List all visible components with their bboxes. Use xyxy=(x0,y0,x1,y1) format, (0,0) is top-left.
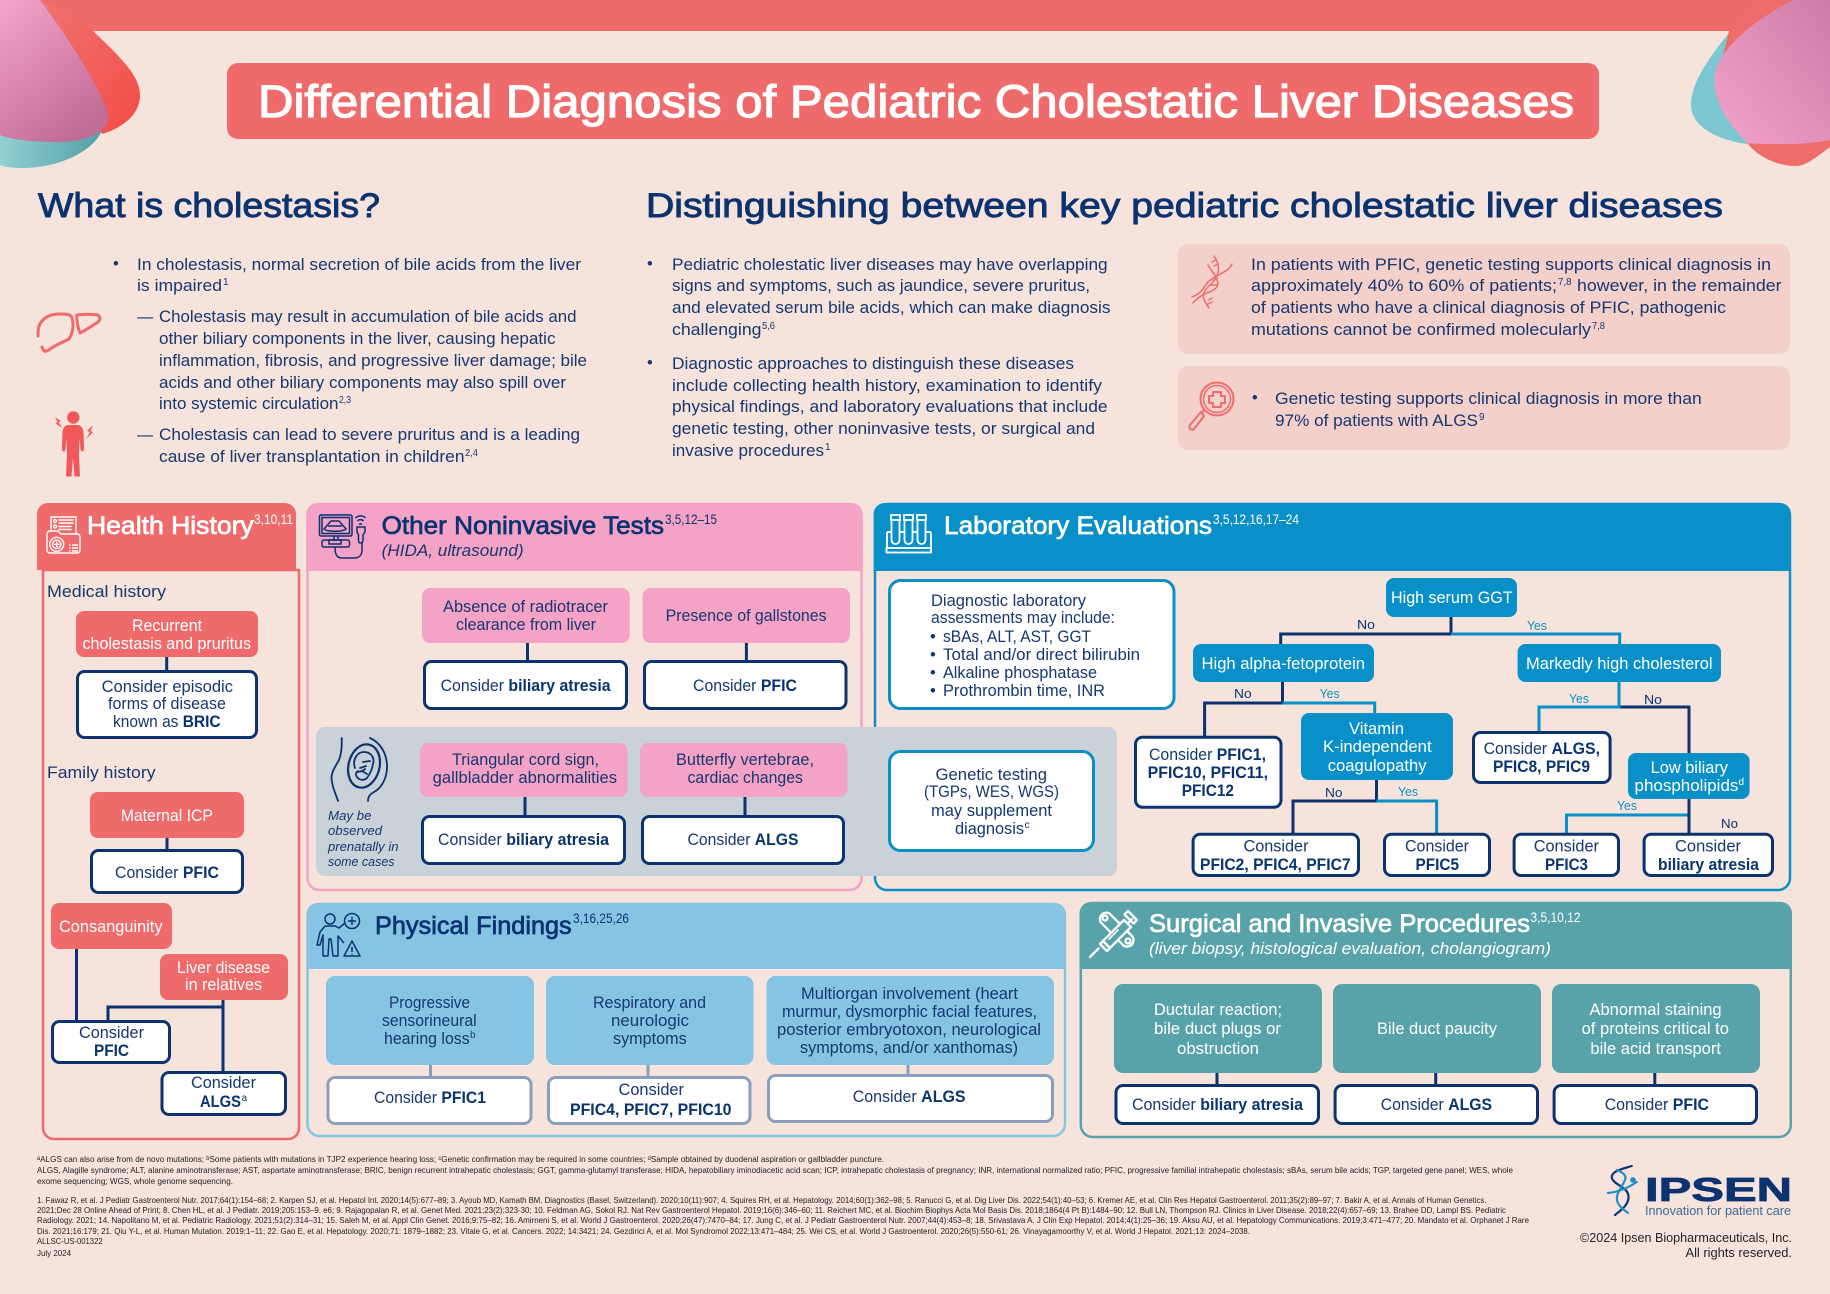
decision: markedly high cholesterol xyxy=(1518,644,1721,682)
finding: recurrent cholestasis: Recurrent xyxy=(132,617,202,635)
finding: hearing loss: b xyxy=(470,1030,476,1041)
decision labels: No xyxy=(1234,686,1252,701)
box: genetic testing: may supplement xyxy=(931,802,1052,820)
result: consider ALGS xyxy=(768,1076,1052,1122)
callout: genetic testing ALGS: 9 xyxy=(1479,412,1485,423)
logo: Ipsen: IPSEN xyxy=(1645,1171,1792,1208)
decision labels: Yes xyxy=(1398,784,1418,799)
result: consider ALGS: ALGS xyxy=(200,1093,241,1111)
connectors xyxy=(430,1065,908,1076)
result: consider ALGS xyxy=(642,816,844,864)
box: diagnostic laboratory assessments: assessments may include: xyxy=(931,609,1115,627)
finding: triangular cord sign xyxy=(420,743,628,797)
footnotes and references: Radiology. 2021; 14. Napolitano M, et al. Pediatric Radiology. 2021;51(2):314–31; 15. Saleh M, et al. Appl Clin Genet. 2016;9:75–82; 16. Amirneni S, et al. World J Gastroenterol. 2020;26(47):7470–84; 17. Jung C, et al. J Pediatr Gastroenterol Nutr. 2007;44(4):453–8; 18. Srivastava A. J Clin Exp Hepatol. 2014;4(1):25–36; 19. Aksu AU, et al. Hepatology Communications. 2019;3:471–477; 20. Mandato et al. Orphanet J Rare xyxy=(37,1215,1529,1225)
result: consider ALGS, PFIC8, PFIC9: Consider ALGS, xyxy=(1484,740,1600,758)
icon: magnifier with cross xyxy=(1189,382,1234,430)
text block: what is cholestasis: 2,4 xyxy=(465,448,478,459)
decision labels: No xyxy=(1325,785,1342,800)
footnotes and references: ALGS can also arise from de novo mutations; xyxy=(40,1154,206,1164)
title xyxy=(227,63,1599,139)
decision: markedly high cholesterol: Markedly high cholesterol xyxy=(1526,655,1712,673)
text block: what is cholestasis: inflammation, fibrosis, and progressive liver damage; bile xyxy=(159,352,587,370)
result: consider ALGS: Consider ALGS xyxy=(1381,1096,1492,1114)
result: consider PFIC1, 10, 11, 12: PFIC10, PFIC11, xyxy=(1148,764,1268,782)
copyright: ©2024 Ipsen Biopharmaceuticals, Inc. xyxy=(1580,1230,1792,1245)
finding: respiratory and neurologic: symptoms xyxy=(613,1030,687,1048)
footnotes and references: 1. Fawaz R, et al. J Pediatr Gastroenterol Nutr. 2017;64(1):154–68; 2. Karpen SJ, et al. Hepatol Int. 2020;14(5):677–89; 3. Ayoub MD, Kamath BM. Diagnostics (Basel, Switzerland). 2020;10(11):907; 4. Squires RH, et al. Hepatology. 2014;60(1):362–98; 5. Ranucci G, et al. Dig Liver Dis. 2022;54(1):40–53; 6. Kremer AE, et al. Clin Res Hepatol Gastroenterol. 2011;35(2):89–97; 7. Bakir A, et al. Annals of Human Genetics. xyxy=(37,1195,1486,1205)
decision labels: No xyxy=(1721,816,1738,831)
header: laboratory evaluations xyxy=(874,503,1791,571)
result: consider PFIC3 xyxy=(1514,834,1618,876)
callout: genetic testing PFIC: of patients who have a clinical diagnosis of PFIC, pathogenic xyxy=(1251,299,1726,317)
finding: liver disease in relatives: Liver disease xyxy=(177,959,270,977)
text block: what is cholestasis: 1 xyxy=(223,277,229,288)
result: consider ALGS: Consider ALGS xyxy=(688,831,798,849)
callout: genetic testing ALGS: • xyxy=(1252,389,1258,407)
footnotes and references: ALLSC-US-001322 xyxy=(37,1236,103,1246)
finding: gallstones xyxy=(643,588,850,643)
footnotes and references xyxy=(37,1154,1529,1258)
result: consider PFIC1, 10, 11, 12: PFIC12 xyxy=(1182,782,1234,800)
box: genetic testing: Genetic testing xyxy=(936,766,1047,784)
result: consider PFIC: Consider xyxy=(79,1024,144,1042)
finding: absence of radiotracer: Absence of radiotracer xyxy=(443,598,608,616)
finding: absence of radiotracer: clearance from liver xyxy=(456,616,596,634)
text block: distinguishing bullets: • xyxy=(647,354,653,372)
text block: distinguishing bullets: Diagnostic approaches to distinguish these diseases xyxy=(672,355,1074,373)
finding: hearing loss xyxy=(326,976,534,1065)
result: consider ALGS xyxy=(162,1072,286,1114)
finding: liver disease in relatives xyxy=(160,954,288,1000)
result: consider biliary atresia xyxy=(422,816,624,864)
result: consider PFIC4, 7, 10: Consider xyxy=(618,1081,684,1099)
text block: distinguishing bullets: 5,6 xyxy=(762,321,775,332)
finding: recurrent cholestasis xyxy=(76,611,258,657)
decision: low biliary phospholipids: d xyxy=(1738,777,1744,788)
copyright xyxy=(1580,1230,1792,1260)
result: consider ALGS, PFIC8, PFIC9 xyxy=(1474,732,1610,782)
text block: what is cholestasis: cause of liver transplantation in children xyxy=(159,448,464,466)
text block: distinguishing bullets: signs and symptoms, such as jaundice, severe pruritus, xyxy=(672,277,1090,295)
finding: respiratory and neurologic xyxy=(546,976,754,1065)
note: may be observed prenatally: observed xyxy=(328,823,383,838)
box: diagnostic laboratory assessments: Prothrombin time, INR xyxy=(943,682,1105,700)
callout: genetic testing ALGS xyxy=(1178,366,1790,450)
result: consider BRIC xyxy=(78,672,256,738)
finding: gallstones: Presence of gallstones xyxy=(666,607,827,625)
footnotes and references: b xyxy=(206,1156,210,1162)
note: may be observed prenatally xyxy=(327,808,398,869)
text block: distinguishing bullets: • xyxy=(647,255,653,273)
decision: vitamin K-independent coagulopathy: K-independent xyxy=(1323,738,1432,756)
result: consider PFIC4, 7, 10 xyxy=(548,1078,750,1124)
text block: what is cholestasis: Cholestasis can lead to severe pruritus and is a leading xyxy=(159,426,580,444)
header: physical findings: Physical Findings xyxy=(375,912,572,940)
text block: distinguishing bullets: genetic testing, other noninvasive tests, or surgical and xyxy=(672,420,1095,438)
heading: distinguishing diseases: Distinguishing between key pediatric cholestatic liver diseases xyxy=(646,187,1723,225)
footnotes and references: ALGS, Alagille syndrome; ALT, alanine aminotransferase; AST, aspartate aminotransferase; BRIC, benign recurrent intrahepatic cholestasis; GGT, gamma-glutamyl transferase; HIDA, hepatobiliary iminodiacetic acid scan; ICP, intrahepatic cholestasis of pregnancy; INR, international normalized ratio; PFIC, progressive familial intrahepatic cholestasis; sBAs, serum bile acids; TGP, targeted gene panel; WES, whole xyxy=(37,1165,1513,1175)
result: consider PFIC4, 7, 10: PFIC4, PFIC7, PFIC10 xyxy=(570,1101,732,1119)
note: may be observed prenatally: prenatally in xyxy=(327,839,398,854)
result: consider PFIC5: PFIC5 xyxy=(1416,856,1459,874)
result: consider PFIC xyxy=(644,662,846,708)
logo: Ipsen xyxy=(1608,1166,1792,1218)
finding: liver disease in relatives: in relatives xyxy=(185,976,262,994)
finding: butterfly vertebrae xyxy=(640,743,848,797)
footnotes and references: Genetic confirmation may be required in some countries; xyxy=(441,1154,648,1164)
finding: butterfly vertebrae: Butterfly vertebrae, xyxy=(676,751,814,769)
text block: distinguishing bullets: and elevated serum bile acids, which can make diagnosis xyxy=(672,299,1110,317)
box: diagnostic laboratory assessments: • xyxy=(930,664,936,682)
decision labels: No xyxy=(1357,617,1375,632)
decision: low biliary phospholipids xyxy=(1628,753,1750,799)
footnotes and references: Dis. 2021;16:179; 21. Qiu Y-L, et al. Human Mutation. 2019;1–11; 22. Gao E, et al. Hepatology. 2020;71: 1879–1882; 23. Vitale G, et al. Cancers. 2022; 14:3421; 24. Gezdirici A, et al. Mol Syndromol 2022;13:471–484; 25. Wei CS, et al. World J Gastroenterol. 2020;26(5):550-61; 26. Vinayagamoorthy V, et al. World J Hepatol. 2021;13: 2024–2038. xyxy=(37,1226,1250,1236)
finding: multiorgan involvement: symptoms, and/or xanthomas) xyxy=(800,1039,1018,1057)
header: health history: 3,10,11 xyxy=(254,512,293,527)
result: consider PFIC3: PFIC3 xyxy=(1545,856,1588,874)
decision: low biliary phospholipids: phospholipids xyxy=(1634,777,1738,795)
text block: what is cholestasis: — xyxy=(137,308,153,326)
footnotes and references: Some patients with mutations in TJP2 experience hearing loss; xyxy=(209,1154,438,1164)
callout: genetic testing ALGS: Genetic testing supports clinical diagnosis in more than xyxy=(1275,390,1702,408)
finding: bile duct paucity: Bile duct paucity xyxy=(1377,1020,1498,1038)
result: consider PFIC: Consider PFIC xyxy=(115,864,219,882)
result: consider PFIC2, 4, 7: Consider xyxy=(1244,838,1309,856)
decision labels: Yes xyxy=(1527,618,1547,633)
text block: what is cholestasis: In cholestasis, normal secretion of bile acids from the liver xyxy=(137,256,582,274)
footnotes and references: 2021;Dec 28 Online Ahead of Print; 8. Chen HL, et al. J Pediatr. 2019;205:153–9. e6; 9. Rajagopalan R, et al. Genet Med. 2021;23(2):323-30; 10. Feldman AG, Sokol RJ. Nat Rev Gastroenterol Hepatol. 2019;16(6):346–60; 11. Reichert MC, et al. Biochim Biophys Acta Mol Basis Dis. 2018;1864(4 Pt B):1484–90; 12. Bull LN, Thompson RJ. Clinics in Liver Disease. 2018;22(4):657–69; 13. Brahee DD, Lampl BS. Pediatric xyxy=(37,1205,1507,1215)
callout: genetic testing PFIC: In patients with PFIC, genetic testing supports clinical diagnosis in xyxy=(1251,256,1771,274)
callout: genetic testing PFIC: however, in the remainder xyxy=(1577,277,1782,295)
finding: respiratory and neurologic: neurologic xyxy=(611,1012,689,1030)
icon: test tubes rack xyxy=(886,515,931,552)
decision labels: Yes xyxy=(1569,691,1589,706)
decision: vitamin K-independent coagulopathy: coagulopathy xyxy=(1328,757,1427,775)
connectors xyxy=(1217,1073,1655,1084)
result: consider PFIC: PFIC xyxy=(94,1042,129,1060)
result: consider biliary atresia xyxy=(1116,1086,1318,1124)
text block: what is cholestasis: acids and other biliary components may also spill over xyxy=(159,374,567,392)
result: consider PFIC5 xyxy=(1384,834,1490,876)
result: consider ALGS xyxy=(1335,1086,1538,1124)
box: diagnostic laboratory assessments: Diagnostic laboratory xyxy=(931,592,1087,610)
box: diagnostic laboratory assessments: Total and/or direct bilirubin xyxy=(943,646,1140,664)
finding: abnormal staining: of proteins critical to xyxy=(1582,1020,1729,1038)
result: consider BRIC: Consider episodic xyxy=(102,678,233,696)
text block: what is cholestasis: • xyxy=(113,255,119,273)
finding: multiorgan involvement: Multiorgan involvement (heart xyxy=(801,985,1018,1003)
header: health history xyxy=(37,503,296,570)
decorative blob top right xyxy=(1691,0,1830,166)
header: surgical and invasive procedures: 3,5,10,12 xyxy=(1530,910,1580,925)
top banner band xyxy=(0,0,1830,31)
box: diagnostic laboratory assessments: • xyxy=(930,646,936,664)
box: genetic testing: c xyxy=(1024,820,1030,831)
decision: vitamin K-independent coagulopathy xyxy=(1301,713,1453,780)
panel: surgical and invasive procedures xyxy=(1080,902,1792,1137)
icon: person with alerts xyxy=(317,914,360,956)
result: consider BRIC: forms of disease xyxy=(108,695,226,713)
result: consider biliary atresia xyxy=(424,662,626,708)
panel: physical findings xyxy=(306,903,1066,1136)
footnotes and references: Sample obtained by duodenal aspiration or gallbladder puncture. xyxy=(651,1154,884,1164)
finding: ductular reaction xyxy=(1114,984,1322,1073)
decision: high alpha-fetoprotein xyxy=(1193,644,1374,682)
connectors: family history branches xyxy=(76,949,223,1072)
flowchart: laboratory decision tree xyxy=(1136,578,1772,876)
finding: maternal ICP xyxy=(90,792,244,838)
icon: liver xyxy=(38,314,100,351)
result: consider ALGS: a xyxy=(242,1093,248,1104)
box: diagnostic laboratory assessments: • xyxy=(930,628,936,646)
result: consider biliary atresia: Consider biliary atresia xyxy=(1132,1096,1304,1114)
finding: multiorgan involvement: posterior embryotoxon, neurological xyxy=(777,1021,1041,1039)
result: consider PFIC1, 10, 11, 12: Consider PFIC1, xyxy=(1149,746,1266,764)
header: health history: Health History xyxy=(87,512,254,540)
finding: maternal ICP: Maternal ICP xyxy=(121,807,213,825)
box: diagnostic laboratory assessments: • xyxy=(930,682,936,700)
text block: distinguishing bullets: include collecting health history, examination to identify xyxy=(672,377,1103,395)
text block: distinguishing bullets: physical findings, and laboratory evaluations that include xyxy=(672,398,1108,416)
result: consider BRIC: known as BRIC xyxy=(113,713,221,731)
result: consider biliary atresia: Consider biliary atresia xyxy=(438,831,610,849)
callout: genetic testing PFIC: 7,8 xyxy=(1558,277,1572,288)
decision labels: Yes xyxy=(1320,686,1340,701)
label: medical history: Medical history xyxy=(47,583,167,601)
box: genetic testing: diagnosis xyxy=(955,820,1024,838)
callout: genetic testing ALGS: 97% of patients with ALGS xyxy=(1275,412,1478,430)
decision labels xyxy=(1234,617,1738,831)
footnotes and references: exome sequencing; WGS, whole genome sequencing. xyxy=(37,1176,233,1186)
callout: genetic testing PFIC: 7,8 xyxy=(1592,321,1605,332)
result: consider ALGS, PFIC8, PFIC9: PFIC8, PFIC9 xyxy=(1493,758,1590,776)
header: laboratory evaluations: Laboratory Evaluations xyxy=(944,512,1212,540)
connectors: decision tree lines xyxy=(1205,617,1689,833)
copyright: All rights reserved. xyxy=(1686,1245,1792,1260)
result: consider ALGS: Consider xyxy=(191,1074,256,1092)
finding: triangular cord sign: gallbladder abnormalities xyxy=(433,769,617,787)
header: laboratory evaluations: 3,5,12,16,17–24 xyxy=(1213,512,1299,527)
finding: absence of radiotracer xyxy=(422,588,630,643)
connector xyxy=(165,657,168,672)
text block: distinguishing bullets: challenging xyxy=(672,321,762,339)
result: consider PFIC xyxy=(92,850,242,892)
finding: bile duct paucity xyxy=(1333,984,1541,1073)
finding: recurrent cholestasis: cholestasis and pruritus xyxy=(82,635,251,653)
heading: what is cholestasis: What is cholestasis? xyxy=(38,187,380,225)
decorative blob top left xyxy=(0,0,140,168)
result: consider PFIC xyxy=(1554,1086,1756,1124)
panel: health history xyxy=(37,503,299,1139)
decision: high serum GGT xyxy=(1386,578,1517,617)
result: consider biliary atresia xyxy=(1644,834,1772,876)
finding: consanguinity: Consanguinity xyxy=(59,918,163,936)
text block: what is cholestasis: other biliary components in the liver, causing hepatic xyxy=(159,330,556,348)
text block: what is cholestasis xyxy=(113,255,587,466)
result: consider PFIC1 xyxy=(328,1078,531,1124)
box: genetic testing xyxy=(890,752,1094,850)
decision: high serum GGT: High serum GGT xyxy=(1391,589,1513,607)
result: consider PFIC: Consider PFIC xyxy=(693,677,797,695)
panel: laboratory evaluations xyxy=(874,503,1791,890)
box: genetic testing: (TGPs, WES, WGS) xyxy=(924,783,1059,801)
text block: what is cholestasis: — xyxy=(137,426,153,444)
connector xyxy=(166,838,168,850)
note: may be observed prenatally: some cases xyxy=(328,854,395,869)
callout: genetic testing PFIC: approximately 40% to 60% of patients; xyxy=(1251,277,1557,295)
header: other noninvasive tests: 3,5,12–15 xyxy=(665,512,717,527)
result: consider PFIC5: Consider xyxy=(1405,838,1469,856)
finding: consanguinity xyxy=(51,903,172,949)
decision: low biliary phospholipids: Low biliary xyxy=(1651,759,1729,777)
finding: butterfly vertebrae: cardiac changes xyxy=(688,769,803,787)
result: consider biliary atresia: biliary atresia xyxy=(1658,856,1760,874)
header: other noninvasive tests: Other Noninvasive Tests xyxy=(382,512,664,540)
finding: hearing loss: sensorineural xyxy=(382,1012,477,1030)
header: surgical and invasive procedures: Surgical and Invasive Procedures xyxy=(1149,910,1530,938)
finding: respiratory and neurologic: Respiratory and xyxy=(593,994,706,1012)
finding: ductular reaction: bile duct plugs or xyxy=(1154,1020,1282,1038)
box: diagnostic laboratory assessments xyxy=(890,580,1174,708)
title: Differential Diagnosis of Pediatric Cholestatic Liver Diseases xyxy=(258,76,1574,127)
header: other noninvasive tests xyxy=(306,503,863,571)
decision: vitamin K-independent coagulopathy: Vitamin xyxy=(1349,720,1404,738)
finding: abnormal staining: Abnormal staining xyxy=(1590,1001,1722,1019)
result: consider PFIC3: Consider xyxy=(1534,838,1599,856)
note: may be observed prenatally: May be xyxy=(328,808,372,823)
panel: other noninvasive tests xyxy=(306,503,863,890)
finding: abnormal staining xyxy=(1552,984,1760,1073)
decision labels: Yes xyxy=(1617,798,1637,813)
result: consider PFIC1, 10, 11, 12 xyxy=(1136,737,1281,807)
header: physical findings: 3,16,25,26 xyxy=(573,911,629,926)
finding: abnormal staining: bile acid transport xyxy=(1590,1040,1721,1058)
icon: DNA xyxy=(1192,256,1232,308)
connectors xyxy=(528,643,746,661)
footnotes and references: July 2024 xyxy=(37,1248,71,1258)
text block: what is cholestasis: 2,3 xyxy=(339,395,351,406)
text block: what is cholestasis: is impaired xyxy=(137,277,222,295)
result: consider PFIC: Consider PFIC xyxy=(1605,1096,1709,1114)
finding: multiorgan involvement xyxy=(767,976,1054,1065)
text block: distinguishing bullets: 1 xyxy=(825,442,831,453)
result: consider biliary atresia: Consider biliary atresia xyxy=(441,677,611,695)
footnotes and references: a xyxy=(37,1156,41,1162)
decision labels: No xyxy=(1644,692,1662,707)
icon: child with pruritus xyxy=(55,411,93,476)
result: consider ALGS: Consider ALGS xyxy=(853,1088,966,1106)
icon: syringe xyxy=(1090,911,1137,957)
box: diagnostic laboratory assessments: sBAs, ALT, AST, GGT xyxy=(943,628,1091,646)
icon: medical record folder xyxy=(47,517,80,553)
finding: triangular cord sign: Triangular cord sign, xyxy=(452,751,599,769)
footnotes and references: d xyxy=(648,1156,651,1162)
text block: distinguishing bullets: invasive procedures xyxy=(672,442,824,460)
result: consider PFIC2, 4, 7: PFIC2, PFIC4, PFIC7 xyxy=(1200,856,1351,874)
text block: what is cholestasis: Cholestasis may result in accumulation of bile acids and xyxy=(159,308,576,326)
icon: helix xyxy=(1608,1166,1637,1215)
prenatal gray band xyxy=(316,727,1117,876)
header: surgical and invasive procedures: (liver biopsy, histological evaluation, cholangiogram) xyxy=(1149,940,1551,958)
finding: multiorgan involvement: murmur, dysmorphic facial features, xyxy=(782,1003,1037,1021)
finding: hearing loss: Progressive xyxy=(389,994,470,1012)
finding: hearing loss: hearing loss xyxy=(384,1030,470,1048)
decision: high alpha-fetoprotein: High alpha-fetoprotein xyxy=(1202,655,1365,673)
icon: fetus in womb xyxy=(332,738,387,801)
callout: genetic testing PFIC: mutations cannot be confirmed molecularly xyxy=(1251,321,1592,339)
finding: ductular reaction: Ductular reaction; xyxy=(1154,1001,1282,1019)
text block: distinguishing bullets xyxy=(647,255,1110,460)
logo: Ipsen: Innovation for patient care xyxy=(1645,1203,1791,1218)
text block: what is cholestasis: into systemic circulation xyxy=(159,395,338,413)
icon: ultrasound machine xyxy=(320,515,366,558)
label: family history: Family history xyxy=(47,764,156,782)
header: physical findings xyxy=(306,903,1066,969)
text block: distinguishing bullets: Pediatric cholestatic liver diseases may have overlapping xyxy=(672,256,1108,274)
result: consider PFIC1: Consider PFIC1 xyxy=(374,1089,486,1107)
connectors xyxy=(525,797,745,815)
footnotes and references: c xyxy=(438,1156,441,1162)
callout: genetic testing PFIC xyxy=(1178,244,1790,354)
header: surgical and invasive procedures xyxy=(1080,902,1792,969)
header: other noninvasive tests: (HIDA, ultrasound) xyxy=(382,542,524,560)
box: diagnostic laboratory assessments: Alkaline phosphatase xyxy=(943,664,1097,682)
finding: ductular reaction: obstruction xyxy=(1177,1040,1259,1058)
result: consider PFIC2, 4, 7 xyxy=(1193,834,1358,876)
result: consider PFIC xyxy=(52,1022,170,1062)
result: consider biliary atresia: Consider xyxy=(1675,838,1741,856)
